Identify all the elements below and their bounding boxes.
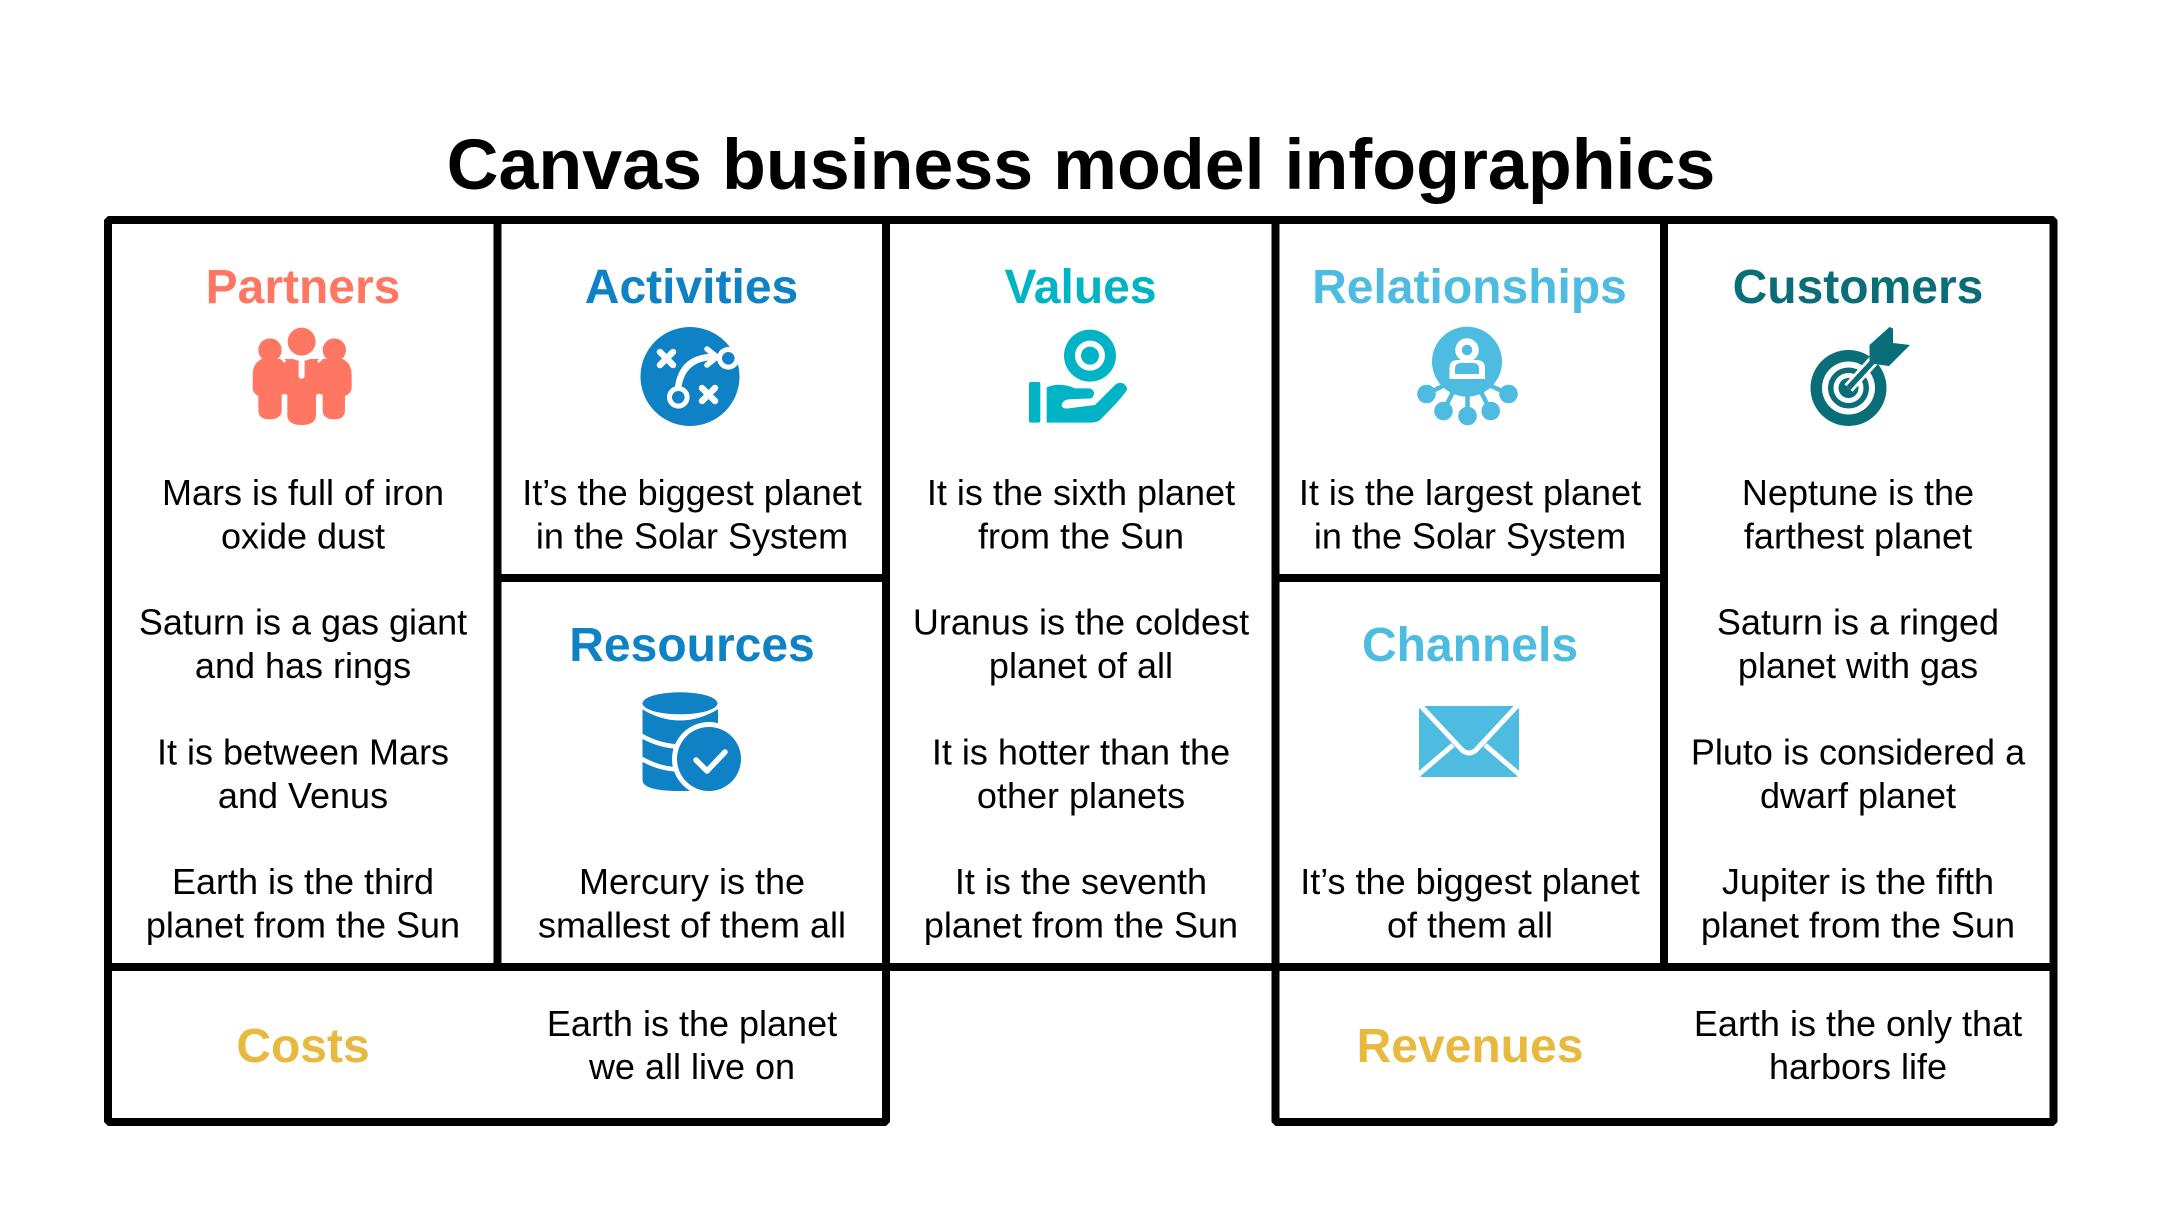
text: partners 4	[146, 861, 460, 946]
text: partners 1: oxide dust	[221, 516, 385, 556]
text: partners 2: Saturn is a gas giant	[139, 602, 467, 642]
text: partners 3: It is between Mars	[157, 732, 449, 772]
title: Canvas business model infographics	[447, 125, 1715, 205]
heading: resources: Resources	[569, 619, 815, 672]
text: partners 2	[139, 602, 467, 686]
text: relationships: It is the largest planet	[1299, 472, 1641, 513]
text: partners 2: and has rings	[195, 645, 411, 686]
text: partners 4: planet from the Sun	[146, 904, 460, 946]
text: values 1: from the Sun	[978, 516, 1184, 556]
text: customers 2: Saturn is a ringed	[1717, 602, 1999, 642]
text: customers 4: planet from the Sun	[1701, 904, 2015, 946]
text: values 3	[932, 732, 1230, 816]
icon: channels envelope	[1418, 705, 1520, 777]
text: values 2: planet of all	[989, 645, 1173, 686]
heading: relationships: Relationships	[1312, 261, 1627, 314]
text: revenues: harbors life	[1769, 1046, 1947, 1087]
panel: customers	[1664, 220, 2054, 967]
icon: activities play diagram	[640, 327, 740, 426]
text: values 1: It is the sixth planet	[927, 472, 1235, 513]
text: relationships: in the Solar System	[1314, 516, 1626, 556]
text: partners 1	[162, 472, 444, 556]
heading: customers: Customers	[1733, 261, 1983, 314]
text: partners 3	[157, 732, 449, 816]
panel: relationships	[1276, 220, 1664, 578]
icon: relationships person network	[1417, 327, 1518, 425]
text: revenues: Earth is the only that	[1694, 1003, 2022, 1044]
text: customers 3: dwarf planet	[1760, 775, 1956, 816]
panel: resources	[498, 578, 886, 967]
text: values 4: planet from the Sun	[924, 904, 1238, 946]
text: costs: Earth is the planet	[547, 1003, 837, 1044]
heading: values: Values	[1004, 261, 1157, 314]
panel: channels	[1276, 578, 1664, 967]
icon: partners group of people	[253, 322, 352, 425]
text: values 2: Uranus is the coldest	[913, 602, 1249, 642]
text: channels: of them all	[1387, 904, 1553, 946]
text: resources	[538, 861, 846, 946]
icon: values hand holding coin	[1029, 330, 1127, 423]
text: activities: in the Solar System	[536, 516, 848, 556]
panel: costs	[108, 967, 886, 1122]
heading: channels: Channels	[1362, 619, 1578, 672]
text: customers 1	[1742, 472, 1974, 556]
text: partners 3: and Venus	[218, 775, 388, 816]
text: costs	[547, 1003, 837, 1087]
heading: revenues: Revenues	[1357, 1020, 1583, 1073]
text: values 1	[927, 472, 1235, 556]
text: customers 3: Pluto is considered a	[1691, 732, 2026, 772]
text: customers 1: farthest planet	[1744, 516, 1972, 556]
text: customers 4: Jupiter is the fifth	[1722, 861, 1994, 902]
heading: costs: Costs	[236, 1020, 370, 1073]
text: customers 2: planet with gas	[1738, 645, 1978, 686]
text: costs: we all live on	[588, 1046, 795, 1087]
text: customers 4	[1701, 861, 2015, 946]
text: activities	[522, 472, 862, 556]
text: values 4	[924, 861, 1238, 946]
text: relationships	[1299, 472, 1641, 556]
text: values 2	[913, 602, 1249, 686]
panel: revenues	[1276, 967, 2054, 1122]
text: activities: It’s the biggest planet	[522, 472, 862, 513]
text: values 3: other planets	[977, 775, 1185, 816]
text: values 4: It is the seventh	[955, 861, 1207, 902]
icon: customers target with arrow	[1810, 327, 1910, 426]
text: partners 1: Mars is full of iron	[162, 472, 444, 513]
text: customers 2	[1717, 602, 1999, 686]
text: revenues	[1694, 1003, 2022, 1087]
panel: partners	[108, 220, 498, 967]
text: values 3: It is hotter than the	[932, 732, 1230, 772]
text: resources: smallest of them all	[538, 904, 846, 946]
panel: activities	[498, 220, 886, 578]
text: customers 3	[1691, 732, 2026, 816]
text: resources: Mercury is the	[579, 861, 805, 902]
panel: values	[886, 220, 1276, 967]
text: channels: It’s the biggest planet	[1300, 861, 1640, 902]
heading: partners: Partners	[206, 261, 400, 314]
heading: activities: Activities	[585, 261, 798, 314]
text: channels	[1300, 861, 1640, 946]
icon: resources database with check	[640, 689, 746, 796]
text: customers 1: Neptune is the	[1742, 472, 1974, 513]
text: partners 4: Earth is the third	[172, 861, 434, 902]
